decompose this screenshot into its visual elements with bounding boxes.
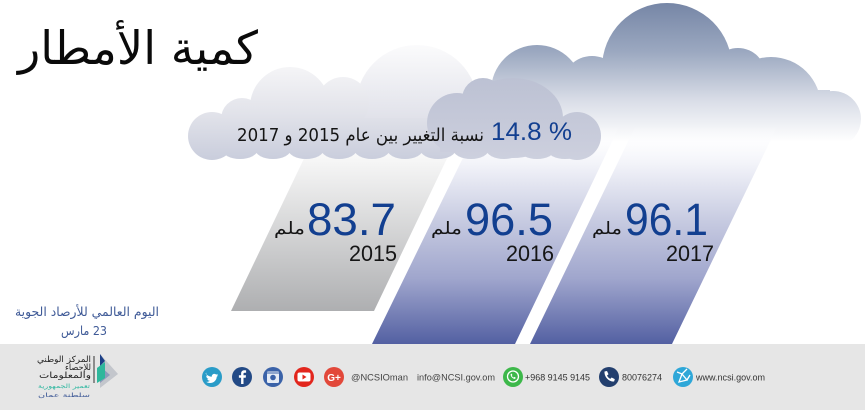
logo: NCSI: تعمير الجمهورية [38, 383, 90, 390]
value group: 2017 [592, 194, 714, 266]
unit: ملم [274, 219, 305, 239]
icon: whatsapp [503, 367, 523, 387]
logo: NCSI: سلطنة عمان [38, 392, 90, 399]
column: 2017 [530, 125, 778, 344]
logo: NCSI: والمعلومات [39, 371, 91, 381]
value group: 2016 [431, 194, 554, 266]
icon: instagram [263, 367, 283, 387]
unit: ملم [592, 219, 622, 239]
toll-free number: 80076274 [622, 372, 662, 384]
logo: NCSI: للإحصاء [65, 363, 91, 373]
callout caption: نسبة التغيير بين عام 2015 و 2017 [237, 125, 484, 146]
year: 2017 [666, 241, 714, 266]
email: info@NCSI.gov.om [417, 372, 495, 384]
website: www.ncsi.gov.om [695, 372, 765, 384]
icon: facebook [232, 367, 252, 387]
handle: @NCSIOman [351, 372, 408, 384]
year: 2016 [506, 241, 554, 266]
callout: change rate 14.8% [237, 118, 572, 146]
whatsapp number: +968 9145 9145 [525, 372, 590, 384]
icon: twitter [202, 367, 222, 387]
value 96.1: 96.1 [625, 194, 708, 245]
icon: youtube [294, 367, 314, 387]
column: 2016 [372, 125, 620, 344]
icon: google plus: G+ [327, 373, 341, 384]
value 96.5: 96.5 [465, 194, 553, 245]
year: 2015 [349, 241, 397, 266]
icon: phone [599, 367, 619, 387]
footer band [0, 344, 865, 410]
title: كمية الأمطار [16, 19, 258, 75]
unit: ملم [431, 219, 462, 239]
icon: web globe [673, 367, 693, 387]
occasion text [15, 304, 159, 339]
value 83.7: 83.7 [307, 194, 396, 245]
cloud: pale back cloud [356, 45, 478, 150]
column: 2015 [231, 100, 475, 311]
icon: google plus [324, 367, 344, 387]
occasion text: 23 مارس [61, 323, 107, 339]
logo: NCSI: المركز الوطني [37, 355, 91, 365]
callout value: 14.8 % [491, 118, 572, 146]
cloud: change callout cloud [188, 67, 601, 160]
cloud: large dark cloud [491, 3, 861, 157]
value group: 2015 [274, 194, 397, 266]
occasion text: اليوم العالمي للأرصاد الجوية [15, 304, 159, 320]
logo: NCSI [37, 354, 118, 399]
